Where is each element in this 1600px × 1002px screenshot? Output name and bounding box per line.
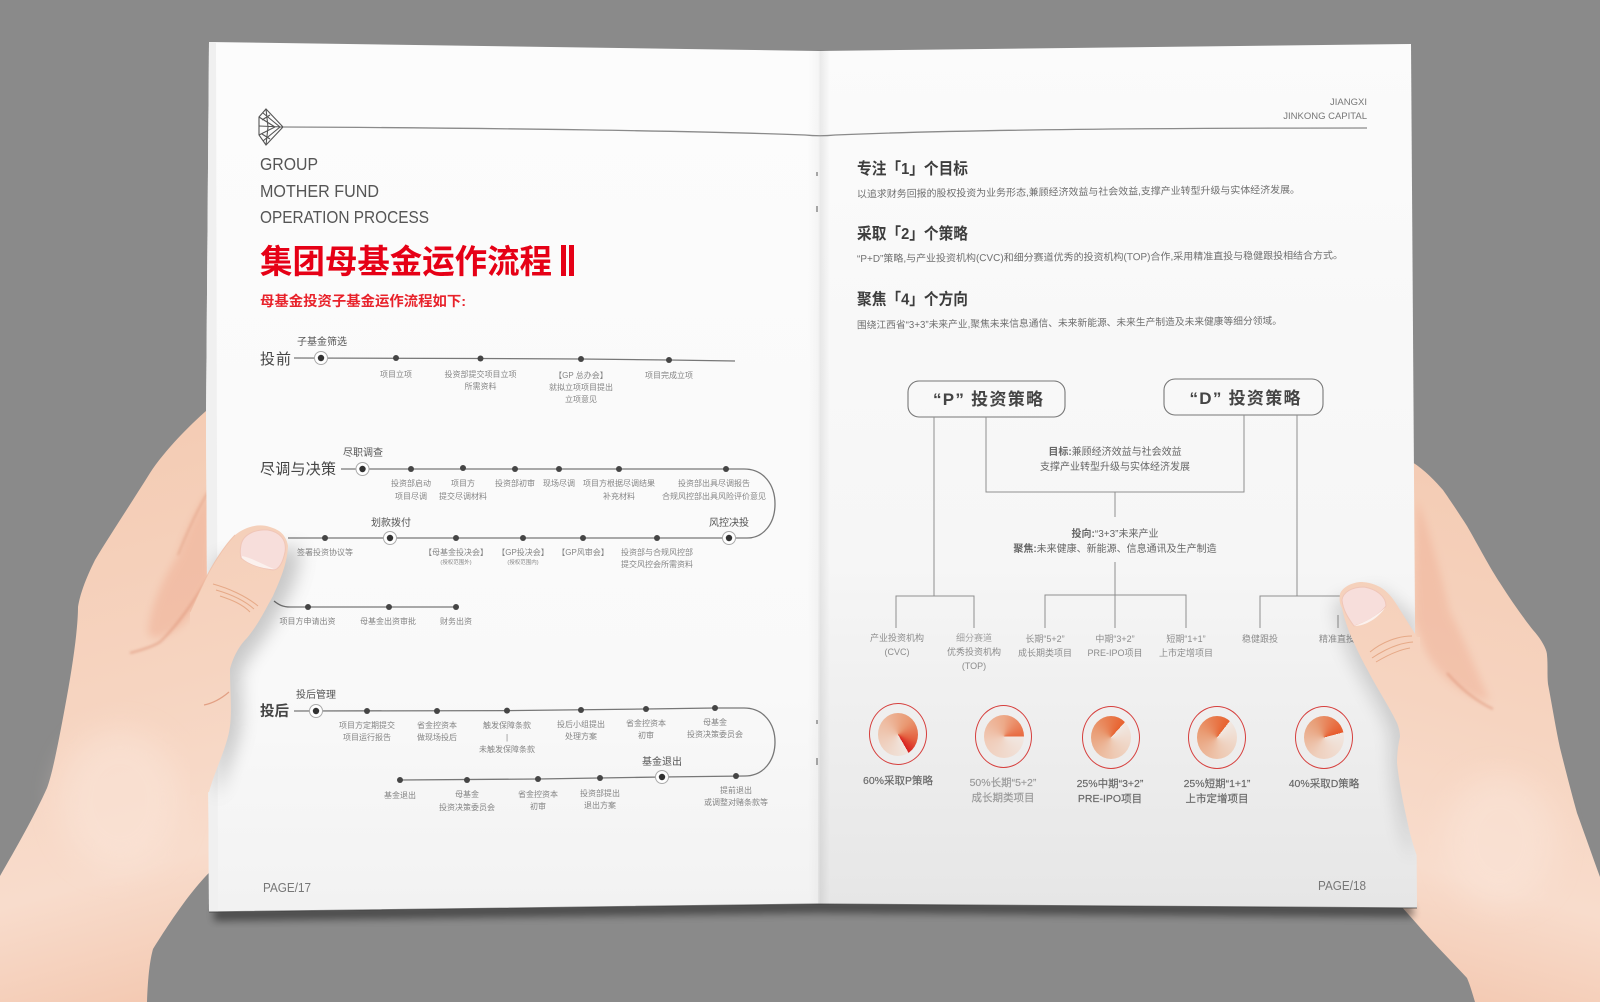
tree labels: 稳健跟投 [1242, 633, 1278, 644]
strategy 2 [857, 224, 1343, 265]
flow: 投后: 触发保障条款 [483, 720, 531, 730]
flow: 投前: 子基金筛选 [297, 335, 347, 348]
goal 1 [857, 159, 1300, 200]
strategy box P: “P” 投资策略 [933, 389, 1043, 409]
flow: 投后: 做现场投后 [417, 732, 457, 742]
flow: 投后: 母基金 [455, 789, 479, 799]
flow: 尽调与决策: 投资部初审 [495, 478, 535, 488]
chart captions: 成长期类项目 [972, 791, 1034, 804]
flow: 投后: 项目运行报告 [343, 732, 391, 742]
english title [260, 154, 429, 227]
english title: GROUP [260, 154, 318, 174]
flow: 投前: 投资部提交项目立项 [444, 369, 516, 379]
book shadow [214, 900, 1414, 921]
flow: 投后: 投后小组提出 [557, 719, 605, 729]
flow: 投后: 投资决策委员会 [687, 729, 743, 739]
flow: 投后: 或调整对赌条款等 [704, 797, 768, 807]
flow: 投后: 初审 [530, 801, 546, 811]
flow: 投后: 投资部提出 [580, 788, 620, 798]
flow: 投后: | [506, 733, 508, 742]
flow: 投前: 立项意见 [565, 394, 597, 404]
flow: 投后: 投后管理 [296, 688, 336, 701]
flow: 尽调与决策: 项目方 [451, 478, 475, 488]
right page brand [1283, 97, 1367, 122]
tree labels: 长期“5+2” [1025, 633, 1065, 644]
english title: MOTHER FUND [260, 181, 379, 201]
flow: 投后: 基金退出 [642, 755, 682, 768]
flow: 投后: 项目方定期提交 [339, 720, 395, 730]
chart captions: 50%长期“5+2” [970, 777, 1037, 789]
staples on spine [816, 172, 818, 765]
tree labels: 产业投资机构 [870, 632, 924, 643]
chart captions: 40%采取D策略 [1289, 777, 1360, 790]
direction 4 [857, 290, 1282, 331]
chart captions: 60%采取P策略 [863, 774, 934, 787]
left thumb shadow on page [215, 546, 300, 800]
tree labels: 细分赛道 [956, 632, 992, 643]
right thumbnail [1342, 587, 1386, 626]
flow: 投后: 省金控资本 [626, 718, 666, 728]
flow: 尽调与决策: 提交风控会所需资料 [621, 559, 693, 569]
left page edge stack [206, 42, 218, 912]
strategy tree connectors [896, 415, 1345, 628]
goal 1: 以追求财务回报的股权投资为业务形态,兼顾经济效益与社会效益,支撑产业转型升级与实体经济发展。 [857, 183, 1300, 200]
chart captions [863, 774, 1360, 805]
flow: 尽调与决策: 【GP风审会】 [557, 547, 609, 557]
flow: 投后: 省金控资本 [518, 789, 558, 799]
flow: 投后: 提前退出 [720, 785, 752, 795]
flow: 尽调与决策: 合规风控部出具风险评价意见 [662, 491, 766, 501]
flow: 尽调与决策: 项目方申请出资 [280, 616, 336, 626]
tree labels [870, 632, 1355, 671]
pie: 25% short term [1188, 706, 1246, 769]
flow: 尽调与决策: 财务出资 [440, 616, 472, 626]
flow: 尽调与决策: 【母基金投决会】 [424, 547, 488, 557]
flow: 尽调与决策 [260, 446, 775, 626]
left thumbnail [240, 530, 285, 570]
focus note [1013, 527, 1217, 555]
flow: 尽调与决策: 补充材料 [603, 491, 635, 501]
goal note: 目标:兼顾经济效益与社会效益 [1048, 445, 1182, 458]
flow: 投后: 投资决策委员会 [439, 802, 495, 812]
strategy 2: 采取「2」个策略 [857, 224, 968, 243]
tree labels: 优秀投资机构 [947, 646, 1001, 657]
flow: 尽调与决策: 项目尽调 [395, 492, 427, 501]
strategy box P [908, 381, 1065, 417]
flow: 投后: 未触发保障条款 [479, 744, 535, 754]
focus note: 聚焦:未来健康、新能源、信息通讯及生产制造 [1013, 542, 1217, 555]
flow: 尽调与决策: 尽职调查 [343, 446, 383, 459]
right thumb and palm [1340, 582, 1420, 856]
goal note: 支撑产业转型升级与实体经济发展 [1040, 460, 1190, 473]
direction 4: 围绕江西省“3+3”未来产业,聚焦未来信息通信、未来新能源、未来生产制造及未来健康等细分领域。 [857, 314, 1282, 331]
flow: 尽调与决策: 签署投资协议等 [297, 547, 353, 557]
flow: 尽调与决策: 项目方根据尽调结果 [583, 478, 655, 488]
flow: 投前: 就拟立项项目提出 [549, 382, 613, 392]
left page [206, 42, 818, 912]
chart captions: 上市定增项目 [1186, 792, 1248, 805]
right thumb shadow on page [1335, 590, 1417, 860]
spine fold [808, 50, 830, 904]
page number 18: PAGE/18 [1318, 878, 1366, 893]
flow: 尽调与决策: 投资部出具尽调报告 [678, 478, 750, 488]
flow: 投后 [260, 688, 775, 812]
flow: 投前: 项目完成立项 [645, 370, 693, 380]
flow: 投后: 退出方案 [584, 800, 616, 810]
flow: 投后: 初审 [638, 730, 654, 740]
pie: 60% P strategy [869, 703, 927, 765]
tree labels: (TOP) [962, 661, 986, 671]
strategy box D: “D” 投资策略 [1190, 388, 1300, 408]
flow: 投前: 【GP 总办会】 [554, 370, 608, 380]
flow: 尽调与决策: 提交尽调材料 [439, 491, 487, 501]
flow: 投前: 所需资料 [464, 381, 496, 391]
chart captions: PRE-IPO项目 [1078, 793, 1142, 805]
english title: OPERATION PROCESS [260, 207, 429, 227]
left hand behind the brochure [0, 411, 214, 1002]
flow: 尽调与决策: 现场尽调 [543, 479, 575, 488]
flow: 投前: 项目立项 [380, 369, 412, 379]
chart captions: 25%短期“1+1” [1184, 777, 1251, 790]
left thumb and palm [190, 525, 288, 795]
flow: 投前 [260, 335, 735, 404]
tree labels: 成长期类项目 [1018, 647, 1072, 658]
flow: 尽调与决策: 【GP投决会】 [497, 547, 549, 557]
strategy box D [1164, 379, 1323, 415]
pie: 40% D strategy [1295, 706, 1353, 769]
right page brand: JIANGXI [1330, 97, 1367, 108]
flow: 投后: 投后 [260, 702, 290, 720]
pie: 50% long term [975, 705, 1032, 768]
flow: 尽调与决策: (授权范围外) [440, 558, 472, 566]
focus note: 投向:“3+3”未来产业 [1072, 527, 1158, 540]
icon: diamond logo [259, 109, 283, 145]
flow: 尽调与决策: 尽调与决策 [260, 461, 336, 478]
flow: 尽调与决策: (授权范围内) [507, 558, 539, 566]
tree labels: 上市定增项目 [1159, 647, 1213, 658]
flow: 尽调与决策: 母基金出资审批 [360, 616, 416, 626]
tree labels: 中期“3+2” [1095, 633, 1135, 644]
flow: 尽调与决策: 投资部与合规风控部 [621, 547, 693, 557]
hands in front of the pages [190, 525, 1420, 854]
strategy 2: “P+D”策略,与产业投资机构(CVC)和细分赛道优秀的投资机构(TOP)合作,采用精准直投与稳健跟投相结合方式。 [857, 249, 1343, 265]
flow: 投后: 省金控资本 [417, 720, 457, 730]
right hand behind the brochure [1400, 462, 1600, 1002]
flow: 尽调与决策: 风控决投 [709, 516, 749, 529]
flow: 投后: 处理方案 [565, 731, 597, 741]
flow: 尽调与决策: 投资部启动 [391, 478, 431, 488]
direction 4: 聚焦「4」个方向 [857, 290, 968, 308]
chinese title: 集团母基金运作流程 [260, 243, 552, 280]
flow: 投后: 基金退出 [384, 790, 416, 800]
page number 17: PAGE/17 [263, 880, 311, 895]
pie: 25% mid term [1082, 706, 1140, 769]
goal note [1040, 445, 1190, 473]
flow: 投前: 投前 [260, 351, 291, 368]
chart captions: 25%中期“3+2” [1077, 777, 1144, 790]
right page brand: JINKONG CAPITAL [1283, 111, 1367, 122]
bottom page edge [209, 904, 1417, 912]
tree labels: 精准直投 [1319, 633, 1355, 644]
header rule across both pages [283, 127, 1367, 136]
goal 1: 专注「1」个目标 [857, 159, 968, 178]
subtitle: 母基金投资子基金运作流程如下: [260, 293, 466, 309]
tree labels: PRE-IPO项目 [1087, 648, 1143, 658]
right page [818, 44, 1417, 908]
flow: 尽调与决策: 划款拨付 [371, 516, 411, 529]
flow: 投后: 母基金 [703, 717, 727, 727]
tree labels: 短期“1+1” [1166, 633, 1206, 644]
tree labels: (CVC) [884, 647, 910, 657]
